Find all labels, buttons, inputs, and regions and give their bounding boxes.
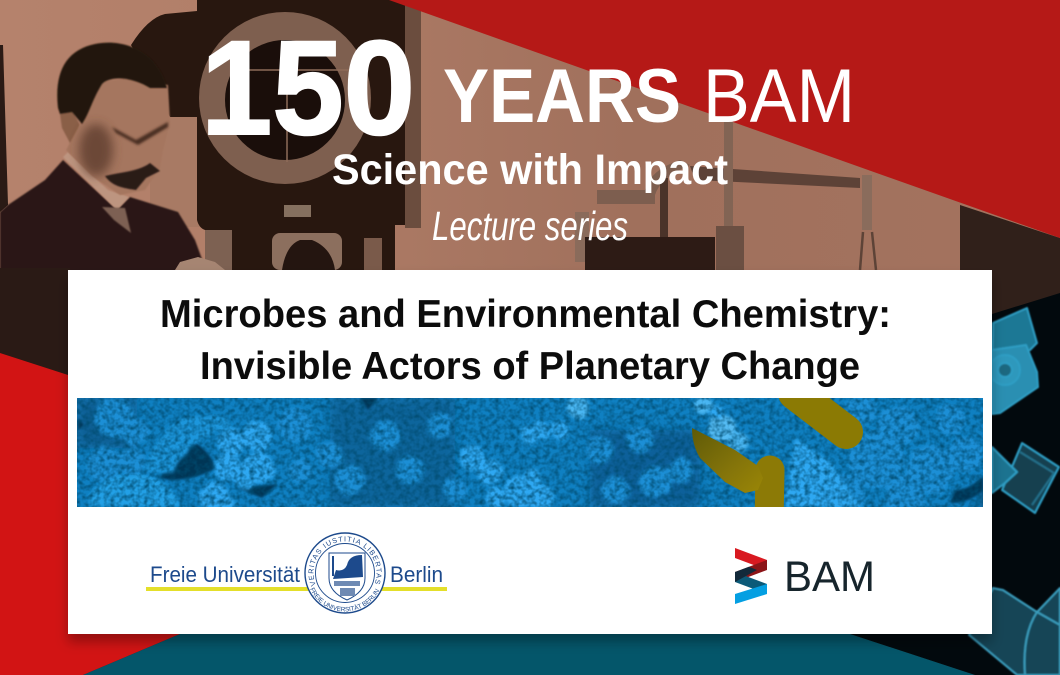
darker central zone [77,398,1010,510]
university seal: FREIE UNIVERSITÄT BERLIN [310,587,380,612]
man: collar [63,152,129,210]
man: shaded cheek [79,124,113,176]
panel: crystal cubes micrograph [850,270,1060,675]
man: ear [60,110,80,143]
logo: Freie Universität Berlin [146,532,447,614]
man: brow and eye [112,122,168,145]
photo: dark strip on left edge [0,45,8,212]
big number 150: 150 [201,14,415,163]
wordmark right: Berlin [390,562,443,587]
photo: dark area under the card [0,268,70,383]
title block: years [201,14,855,163]
university seal: VERITAS IUSTITIA LIBERTAS [308,536,382,587]
photo: wall panel behind the man [150,117,200,227]
crystal cluster top [990,308,1038,414]
man: hand [175,257,225,270]
lecture series label: Lecture series [432,203,628,249]
bacterium upper right [795,393,846,432]
years: YEARS [443,54,681,139]
photo: lever beam and rods [575,122,876,270]
BAM word: BAM [703,54,855,139]
man: suit [0,160,206,380]
crystal cube bottom [969,588,1060,675]
BAM wordmark: BAM [784,553,875,601]
wordmark left: Freie Universität [150,562,300,587]
bright clusters [88,396,860,517]
photo: dark cabinet on right [960,205,1060,340]
teal band bottom [83,634,975,675]
red triangle top right [389,0,1060,238]
dark cavities [78,398,983,503]
white card [68,270,992,634]
lecture title line 2: Invisible Actors of Planetary Change [200,345,860,388]
man: face [66,78,170,195]
man: tie [102,207,131,233]
image: blue microbes micrograph [77,398,983,507]
subtitle: Science with Impact [332,146,728,194]
red shape lower left [0,353,300,675]
university seal [304,532,386,614]
logo: BAM [735,548,875,604]
yellow bacteria [692,393,846,525]
yellow rule [146,587,447,591]
mid tone lumps [87,394,983,515]
fine granular texture [77,398,983,507]
crystal cube middle [992,443,1059,513]
man: hair [57,43,167,124]
lecture title [160,293,891,388]
photo: man [0,43,225,380]
photo: testing machine body [131,0,421,270]
bacterium lower [769,470,770,525]
lecture title line 1: Microbes and Environmental Chemistry: [160,293,891,336]
background photo: scientist with testing machine [0,0,1060,383]
bacterium centre [692,428,763,493]
BAM mark [735,548,767,604]
man: moustache [105,163,160,190]
